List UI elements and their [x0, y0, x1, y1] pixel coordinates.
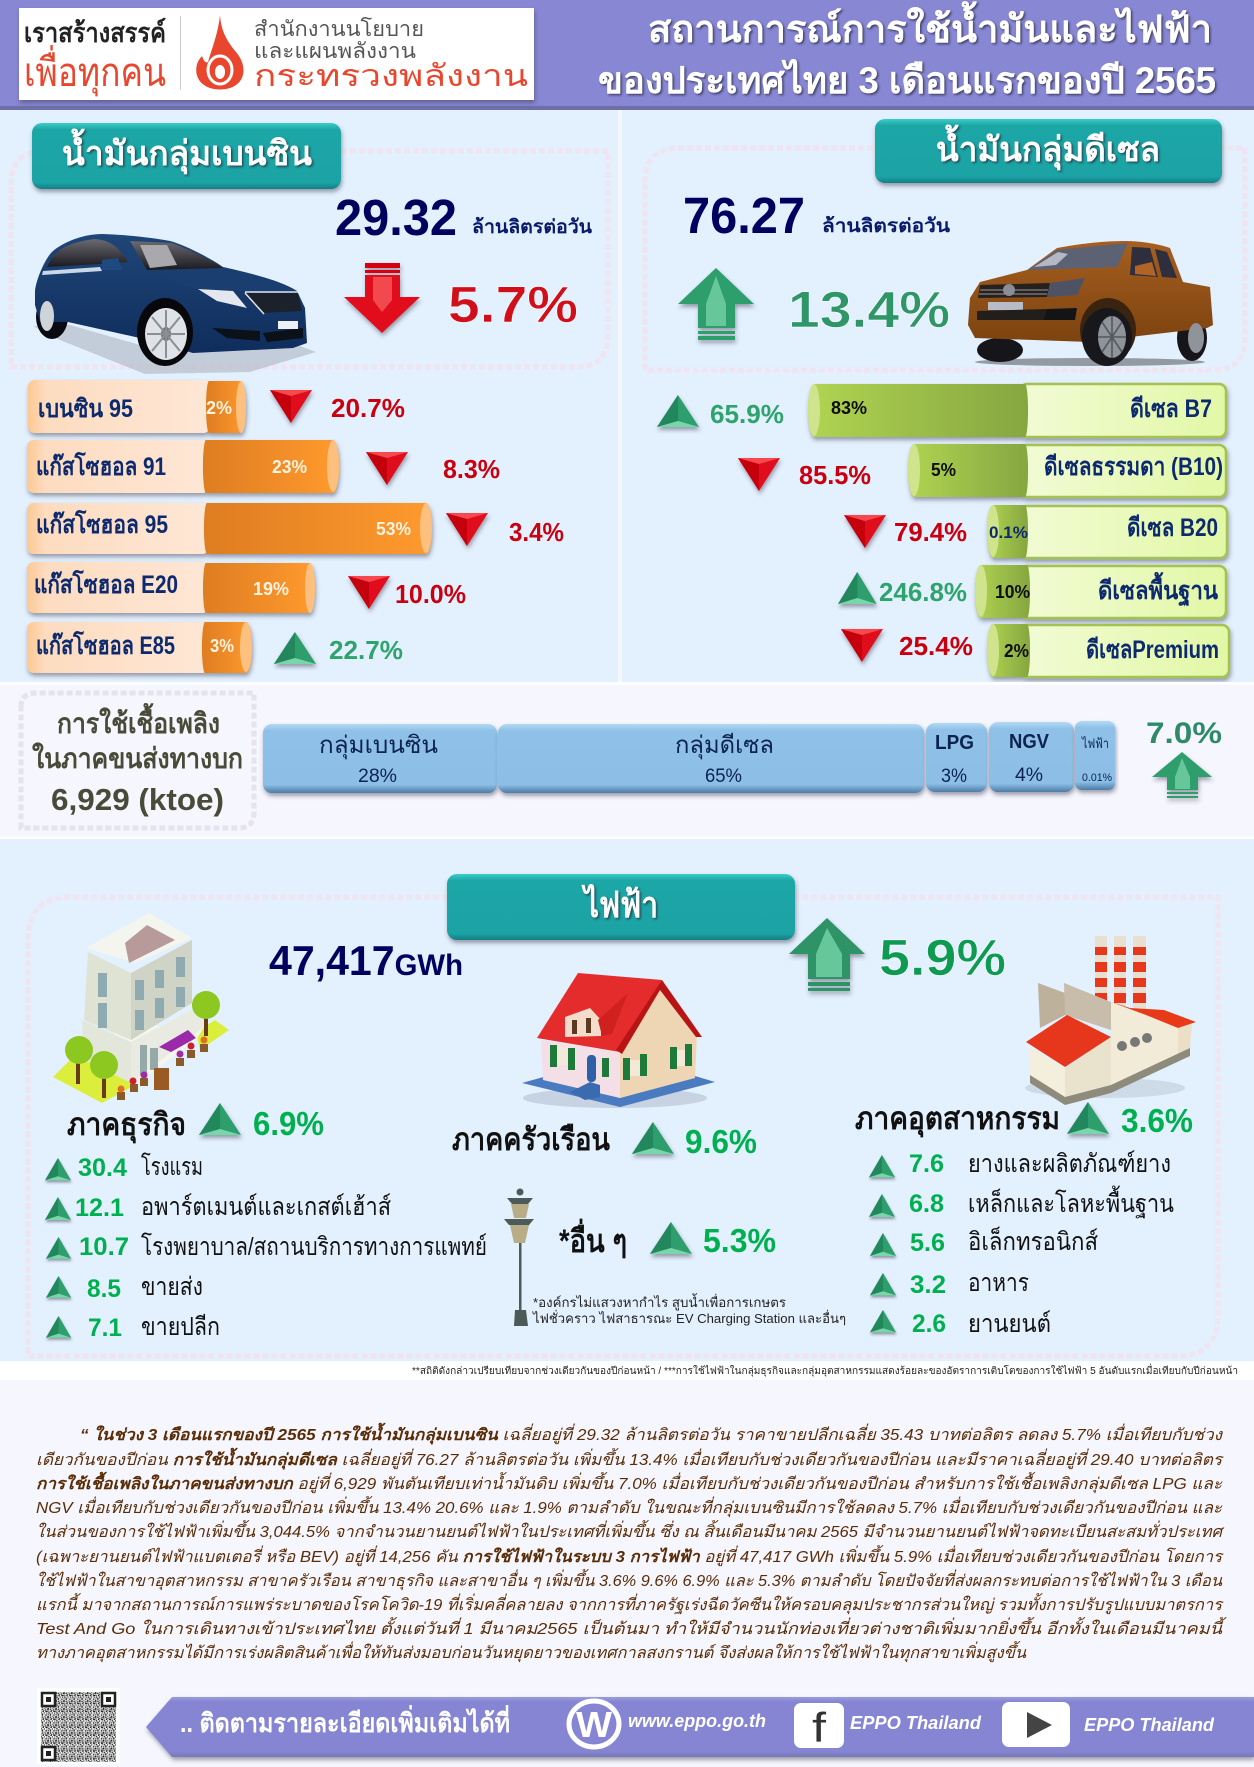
- segment: LPG: 3%: [941, 766, 967, 787]
- bar: แก๊สโซฮอล 95: 53%: [376, 519, 411, 539]
- change 246.8: [838, 572, 967, 607]
- bar: ดีเซลธรรมดา (B10): 5%: [931, 460, 956, 480]
- summary paragraph: (เฉพาะยานยนต์ไฟฟ้าแบตเตอรี่ หรือ BEV) อยู่ที่ 14,256 คัน การใช้ไฟฟ้าในระบบ 3 การไฟฟ้า อยู่ที่ 47,417 GWh เพิ่มขึ้น 5.9% เมื่อเทียบช่วงเดียวกันของปีก่อน โดยการ: [36, 1545, 1225, 1567]
- icon: facebook: [794, 1703, 844, 1751]
- heading: gasoline group: น้ำมันกลุ่มเบนซิน: [62, 128, 312, 175]
- icon: commercial building: [53, 913, 229, 1103]
- summary paragraph: “ ในช่วง 3 เดือนแรกของปี 2565 การใช้น้ำมันกลุ่มเบนซิน เฉลี่ยอยู่ที่ 29.32 ล้านลิตรต่อวัน ราคาขายปลีกเฉลี่ย 35.43 บาทต่อลิตร ลดลง 5.7% เมื่อเทียบกับช่วง: [80, 1422, 1223, 1445]
- sector: household: [452, 1122, 757, 1160]
- panel: diesel background: [622, 108, 1254, 682]
- item: apartment: [45, 1193, 391, 1222]
- bar: ดีเซลธรรมดา (B10): ดีเซลธรรมดา (B10): [1044, 453, 1223, 481]
- summary paragraph: ใช้ไฟฟ้าในสาขาอุตสาหกรรม สาขาครัวเรือน สาขาธุรกิจ และสาขาอื่น ๆ เพิ่มขึ้น 3.6% 9.6% 6.9% และ 5.3% ตามลำดับ โดยปัจจัยที่ส่งผลกระทบต่อการใช้ไฟฟ้าใน 3 เดือน: [36, 1569, 1223, 1591]
- note: others: ไฟชั่วคราว ไฟสาธารณะ EV Charging Station และอื่นๆ: [532, 1310, 846, 1326]
- bar: ดีเซล B20: ดีเซล B20: [1127, 514, 1218, 542]
- electricity total: 47,417GWh: [269, 937, 463, 984]
- footnote: **สถิติดังกล่าวเปรียบเทียบจากช่วงเดียวกันของปีก่อนหน้า / ***การใช้ไฟฟ้าในกลุ่มธุรกิจและกลุ่มอุตสาหกรรมแสดงร้อยละของอัตราการเติบโตของการใช้ไฟฟ้า 5 อันดับแรกเมื่อเทียบกับปีก่อนหน้า: [412, 1363, 1238, 1377]
- bar: แก๊สโซฮอล 91: 23%: [272, 457, 307, 477]
- gasoline total: ล้านลิตรต่อวัน: [472, 216, 592, 238]
- bar: ดีเซล Premium: 2%: [1004, 641, 1029, 661]
- panel: land transport fuel: การใช้เชื้อเพลิง: [57, 702, 220, 739]
- icon: QR code: [37, 1688, 120, 1764]
- change 79.4: [844, 515, 967, 548]
- item: food: 3.2: [910, 1271, 946, 1299]
- segment: gasoline group: [263, 724, 497, 793]
- transport change: [1146, 717, 1222, 798]
- header bar: [0, 0, 1254, 110]
- bar: ดีเซลพื้นฐาน: 10%: [995, 582, 1030, 602]
- segment: electricity: 0.01%: [1082, 772, 1112, 784]
- bar: ดีเซล B7: ดีเซล B7: [1130, 395, 1212, 423]
- summary paragraph: การใช้เชื้อเพลิงในภาคขนส่งทางบก อยู่ที่ 6,929 พันตันเทียบเท่าน้ำมันดิบ เพิ่มขึ้น 7.0% เมื่อเทียบกับช่วงเดียวกันของปีก่อน สำหรับการใช้เชื้อเพลิงกลุ่มดีเซล LPG และ: [36, 1471, 1223, 1494]
- sector: industry: ภาคอุตสาหกรรม: [855, 1101, 1060, 1138]
- summary paragraph: เดียวกันของปีก่อน การใช้น้ำมันกลุ่มดีเซล เฉลี่ยอยู่ที่ 76.27 ล้านลิตรต่อวัน เพิ่มขึ้น 13.4% เมื่อเทียบกับช่วงเดียวกันของปีก่อน และมีราคาเฉลี่ยอยู่ที่ 29.40 บาทต่อลิตร: [36, 1447, 1225, 1470]
- footer ribbon: .. ติดตามรายละเอียดเพิ่มเติมได้ที่: [180, 1704, 510, 1738]
- item: steel: เหล็กและโลหะพื้นฐาน: [968, 1185, 1174, 1218]
- icon: red down arrow: [344, 263, 420, 333]
- logo panel: และแผนพลังงาน: [254, 40, 416, 63]
- electricity change: 5.9%: [879, 929, 1006, 986]
- segment: NGV: [989, 722, 1074, 792]
- sector: business: 6.9%: [253, 1105, 324, 1142]
- dashed frame: gasoline: [11, 151, 608, 367]
- bar: แก๊สโซฮอล E85: แก๊สโซฮอล E85: [36, 630, 175, 660]
- logo panel: สำนักงานนโยบาย: [254, 17, 424, 41]
- bar: ดีเซลธรรมดา (B10): [908, 444, 1226, 497]
- item: retail: 7.1: [88, 1314, 122, 1342]
- summary paragraph: NGV เมื่อเทียบกับช่วงเดียวกันของปีก่อน เพิ่มขึ้น 13.4% 20.6% และ 1.9% ตามลำดับ ในขณะที่กลุ่มเบนซินมีการใช้ลดลง 5.7% เมื่อเทียบกับช่วงเดียวกันของปีก่อน และ: [36, 1496, 1223, 1518]
- segment: diesel group: 65%: [705, 766, 742, 787]
- item: electronics: [870, 1226, 1098, 1257]
- item: wholesale: ขายส่ง: [141, 1273, 203, 1301]
- segment: LPG: LPG: [935, 732, 974, 754]
- gasoline change: 5.7%: [448, 276, 578, 333]
- dashed frame: diesel: [645, 148, 1245, 370]
- change 65.9: [657, 395, 784, 429]
- bar: แก๊สโซฮอล E20: 19%: [253, 579, 289, 599]
- change 10.0: [348, 576, 466, 609]
- item: vehicles: [870, 1310, 1051, 1338]
- segment: NGV: 4%: [1015, 765, 1043, 786]
- logo panel: เพื่อทุกคน: [24, 45, 166, 97]
- panel: electricity background: [0, 839, 1254, 1361]
- bar: ดีเซล Premium: ดีเซลPremium: [1086, 636, 1219, 664]
- bar: ดีเซล Premium: [987, 624, 1229, 677]
- change 20.7: 20.7%: [331, 393, 405, 423]
- item: hospital: 10.7: [79, 1233, 129, 1261]
- summary paragraph: แรกนี้ มาจากสถานการณ์การแพร่ระบาดของโรคโควิด-19 ที่เริ่มคลี่คลายลง จากการที่ภาครัฐเร่งฉีดวัคซีนให้ครอบคลุมประชากรส่วนใหญ่ รวมทั้งการปรับรูปแบบมาตรการ: [36, 1593, 1224, 1615]
- diesel total: [683, 187, 950, 244]
- segment: gasoline group: กลุ่มเบนซิน: [319, 732, 438, 760]
- bar: ดีเซล B7: 83%: [831, 398, 867, 418]
- item: retail: [46, 1313, 220, 1342]
- icon: house: [522, 973, 715, 1108]
- change 79.4: 79.4%: [894, 517, 967, 547]
- icon: blue car: [33, 234, 316, 374]
- sector: business: [45, 1103, 487, 1342]
- item: electronics: 5.6: [910, 1229, 945, 1257]
- change 85.5: 85.5%: [799, 460, 871, 490]
- heading: diesel group: [875, 119, 1222, 183]
- bar: เบนซิน 95: 2%: [206, 398, 232, 418]
- bar: ดีเซล B7: [808, 384, 1226, 437]
- change 25.4: 25.4%: [899, 631, 973, 661]
- share bars: [263, 721, 1115, 793]
- icon: facebook: f: [812, 1704, 826, 1751]
- bar: แก๊สโซฮอล E85: 3%: [210, 636, 234, 656]
- transport band dividers: [0, 682, 1254, 685]
- item: rubber: ยางและผลิตภัณฑ์ยาง: [968, 1150, 1171, 1178]
- change 22.7: 22.7%: [329, 635, 403, 665]
- change 3.4: [446, 513, 564, 547]
- sector: household: ภาคครัวเรือน: [452, 1122, 610, 1157]
- icon: youtube: [1002, 1702, 1070, 1747]
- change 25.4: [841, 629, 973, 662]
- item: retail: ขายปลีก: [141, 1313, 220, 1341]
- summary paragraph: ทางภาคอุตสาหกรรมได้มีการเร่งผลิตสินค้าเพื่อให้ทันส่งมอบก่อนวันหยุดยาวของเทศกาลสงกรานต์ จึงส่งผลให้การใช้ไฟฟ้าในทุกสาขาเพิ่มสูงขึ้น: [36, 1641, 1027, 1663]
- sector: others: *อื่น ๆ: [559, 1218, 627, 1259]
- title: [598, 1, 1216, 101]
- item: hospital: [46, 1232, 487, 1261]
- facebook name: EPPO Thailand: [850, 1713, 982, 1733]
- bar: ดีเซล B20: [987, 505, 1227, 558]
- sector: household: 9.6%: [685, 1123, 757, 1160]
- gasoline changes: [270, 390, 564, 665]
- change 65.9: 65.9%: [710, 399, 784, 429]
- dashed frame: electricity: [28, 897, 1218, 1356]
- bar: ดีเซลพื้นฐาน: ดีเซลพื้นฐาน: [1098, 571, 1218, 607]
- diesel changes: [657, 395, 973, 662]
- segment: diesel group: [498, 724, 924, 793]
- segment: electricity: ไฟฟ้า: [1081, 736, 1109, 751]
- diesel total: ล้านลิตรต่อวัน: [822, 215, 950, 237]
- item: food: อาหาร: [968, 1269, 1029, 1297]
- bar: แก๊สโซฮอล E20: [27, 562, 315, 613]
- icon: green up arrow: [678, 268, 754, 340]
- icon: website logo: [569, 1701, 619, 1747]
- diesel change: 13.4%: [788, 281, 950, 338]
- gasoline total: 29.32: [335, 189, 457, 246]
- item: apartment: อพาร์ตเมนต์และเกสต์เฮ้าส์: [141, 1193, 391, 1221]
- item: rubber: 7.6: [909, 1150, 944, 1178]
- item: apartment: 12.1: [75, 1194, 124, 1222]
- change 10.0: 10.0%: [395, 579, 466, 609]
- change 85.5: [738, 458, 871, 491]
- item: hospital: โรงพยาบาล/สถานบริการทางการแพทย์: [141, 1232, 487, 1261]
- footnote strip: [0, 1361, 1254, 1380]
- item: food: [870, 1269, 1029, 1299]
- bar: ดีเซล B20: 0.1%: [989, 523, 1028, 542]
- bar: เบนซิน 95: เบนซิน 95: [38, 395, 133, 423]
- icon: large green up arrow: [789, 918, 865, 991]
- icon: brown pickup: [968, 241, 1213, 366]
- summary paragraph: Test And Go ในการเดินทางเข้าประเทศไทย ตั้งแต่วันที่ 1 มีนาคม2565 เป็นต้นมา ทำให้มีจำนวนนักท่องเที่ยวต่างชาติเพิ่มมากยิ่งขึ้น อีกทั้งในเดือนมีนาคมนี้: [36, 1617, 1227, 1638]
- diesel bars: [808, 384, 1229, 677]
- note: others: [532, 1293, 846, 1326]
- icon: factory: [1025, 936, 1196, 1105]
- title: สถานการณ์การใช้น้ำมันและไฟฟ้า: [648, 1, 1212, 51]
- title: ของประเทศไทย 3 เดือนแรกของปี 2565: [598, 58, 1216, 101]
- item: wholesale: [46, 1273, 203, 1303]
- bar: แก๊สโซฮอล 95: [27, 503, 432, 554]
- gasoline bars: [27, 380, 432, 673]
- item: steel: 6.8: [909, 1190, 944, 1218]
- change 8.3: 8.3%: [443, 454, 500, 484]
- item: vehicles: 2.6: [912, 1310, 946, 1338]
- item: electronics: อิเล็กทรอนิกส์: [968, 1226, 1098, 1256]
- summary paragraph: [36, 1422, 1227, 1663]
- bar: แก๊สโซฮอล 91: แก๊สโซฮอล 91: [36, 451, 166, 481]
- segment: gasoline group: 28%: [358, 766, 397, 787]
- bar: แก๊สโซฮอล 95: แก๊สโซฮอล 95: [36, 509, 168, 539]
- bar: ดีเซลพื้นฐาน: [975, 565, 1226, 618]
- heading: electricity: ไฟฟ้า: [581, 883, 658, 925]
- icon: street lamp: [504, 1188, 534, 1326]
- item: hotel: โรงแรม: [141, 1152, 203, 1181]
- bar: แก๊สโซฮอล 91: [27, 440, 339, 493]
- logo panel: [19, 8, 534, 100]
- logo panel: กระทรวงพลังงาน: [254, 60, 528, 93]
- bar: แก๊สโซฮอล E85: [27, 622, 252, 673]
- change 8.3: [366, 452, 500, 485]
- note: others: *องค์กรไม่แสวงหากำไร สูบน้ำเพื่อการเกษตร: [533, 1293, 786, 1311]
- segment: LPG: [926, 723, 987, 792]
- change 20.7: [270, 390, 405, 423]
- sector: industry: [855, 1101, 1193, 1338]
- footer ribbon: [146, 1697, 1254, 1757]
- item: hotel: 30.4: [78, 1154, 127, 1182]
- segment: electricity: [1075, 721, 1115, 790]
- panel: gasoline background: [0, 108, 618, 682]
- sector: business: ภาคธุรกิจ: [67, 1107, 186, 1144]
- website: www.eppo.go.th: [628, 1711, 766, 1731]
- heading: electricity: [447, 874, 795, 940]
- icon: website logo: W: [576, 1704, 612, 1745]
- panel: land transport fuel: ในภาคขนส่งทางบก: [32, 742, 243, 774]
- bar: เบนซิน 95: [28, 380, 246, 433]
- heading: gasoline group: [32, 123, 341, 189]
- bar: แก๊สโซฮอล E20: แก๊สโซฮอล E20: [34, 569, 178, 599]
- segment: diesel group: กลุ่มดีเซล: [675, 732, 774, 760]
- gasoline total: [335, 189, 592, 246]
- heading: diesel group: น้ำมันกลุ่มดีเซล: [936, 124, 1160, 171]
- sector: others: [559, 1218, 776, 1259]
- item: steel: [869, 1185, 1174, 1218]
- change 3.4: 3.4%: [509, 517, 564, 547]
- transport change: 7.0%: [1146, 717, 1222, 750]
- change 246.8: 246.8%: [879, 577, 967, 607]
- sector: others: 5.3%: [703, 1222, 776, 1259]
- youtube name: EPPO Thailand: [1084, 1715, 1215, 1735]
- item: rubber: [869, 1150, 1171, 1178]
- logo panel: เราสร้างสรรค์: [24, 17, 166, 48]
- item: vehicles: ยานยนต์: [968, 1310, 1051, 1338]
- segment: NGV: NGV: [1009, 731, 1050, 753]
- sector: industry: 3.6%: [1121, 1102, 1193, 1139]
- panel: land transport fuel: [21, 693, 254, 828]
- diesel total: 76.27: [683, 187, 805, 244]
- item: wholesale: 8.5: [87, 1275, 121, 1303]
- change 22.7: [274, 632, 403, 665]
- panel: land transport fuel: 6,929 (ktoe): [51, 782, 224, 817]
- item: hotel: [45, 1152, 203, 1182]
- summary paragraph: ในส่วนของการใช้ไฟฟ้าเพิ่มขึ้น 3,044.5% จากจำนวนยานยนต์ไฟฟ้าในประเทศที่เพิ่มขึ้น ซึ่ง ณ สิ้นเดือนมีนาคม 2565 มีจำนวนยานยนต์ไฟฟ้าจดทะเบียนสะสมทั่วประเทศ: [36, 1520, 1225, 1541]
